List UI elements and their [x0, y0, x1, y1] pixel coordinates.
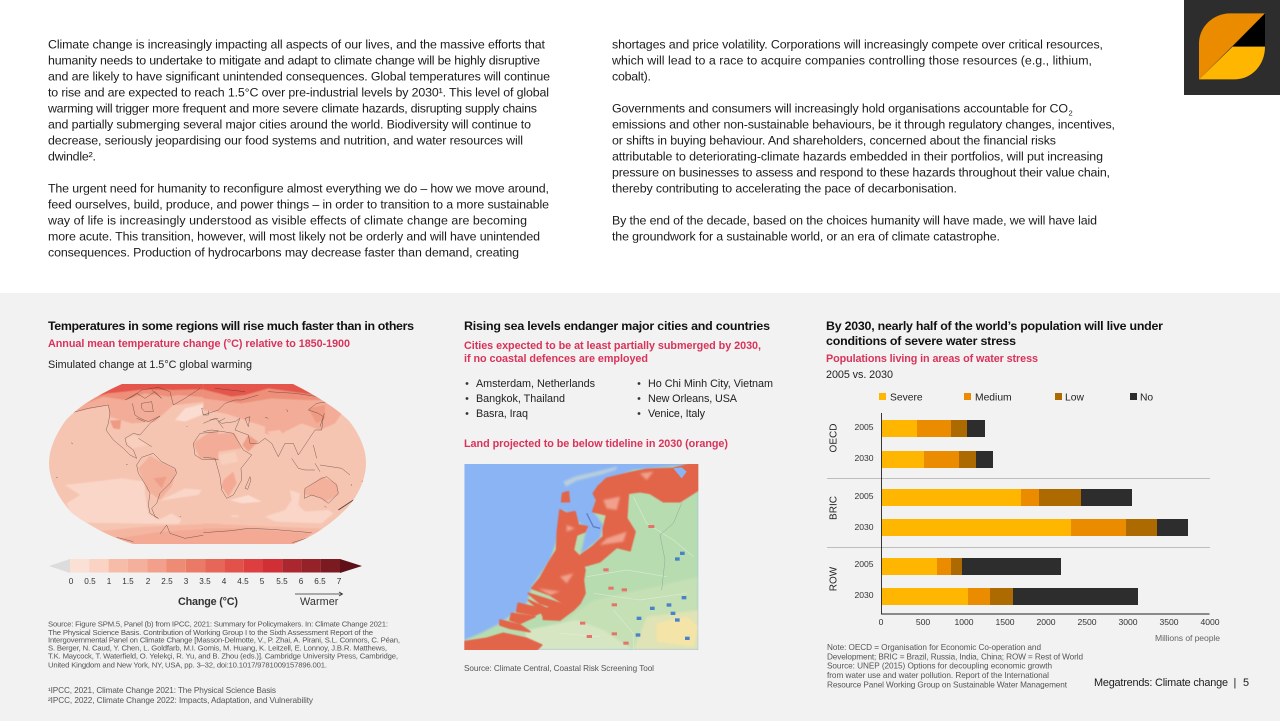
colour bar legend: 7	[337, 577, 342, 586]
body text: right column: thereby contributing to accelerating the pace of decarbonisation.	[612, 182, 957, 196]
colour bar legend: 0.5	[84, 577, 96, 586]
colour bar legend: 5	[260, 577, 265, 586]
caption: simulated change: Simulated change at 1.5°C global warming	[48, 359, 252, 371]
body text: right column: cobalt).	[612, 70, 651, 84]
footnotes	[48, 686, 314, 705]
note and source: water stress: from water use and water pollution. Report of the International	[827, 671, 1049, 680]
legend: stress levels: Medium	[975, 392, 1012, 404]
note and source: water stress: Development; BRIC = Brazil, Russia, India, China; ROW = Rest of World	[827, 652, 1083, 661]
axis ticks: 1500	[995, 617, 1015, 627]
body text: right column: the groundwork for a sustainable world, or an era of climate catastrophe.	[612, 230, 1000, 244]
western hemisphere	[56, 380, 218, 545]
bars: BRIC 2005	[882, 489, 1132, 506]
axis ticks: 0	[879, 617, 884, 627]
heading: water stress: By 2030, nearly half of the world’s population will live under	[826, 319, 1163, 333]
colour bar legend: 1.5	[122, 577, 134, 586]
body text: left column	[47, 38, 550, 260]
body text: right column: pressure on businesses to assess and respond to these hazards throughout their value chain,	[612, 166, 1110, 180]
year labels: 2030	[854, 453, 874, 463]
list of cities	[466, 378, 773, 420]
background: lower grey band	[0, 293, 1280, 721]
body text: left column: Climate change is increasingly impacting all aspects of our lives, and the massive efforts that	[48, 38, 546, 52]
body text: right column: which will lead to a race to acquire companies controlling those resources (e.g., lithium,	[611, 54, 1092, 68]
bars: ROW 2005	[882, 558, 1061, 575]
year labels: 2030	[854, 590, 874, 600]
body text: left column: more acute. This transition, however, will most likely not be orderly and will have unintended	[48, 230, 540, 244]
axis title: Millions of people	[1155, 633, 1220, 643]
heading: sea levels: Rising sea levels endanger major cities and countries	[464, 319, 770, 333]
body text: right column: or shifts in buying behaviour. And shareholders, concerned about the financial risks	[612, 134, 1056, 148]
colour bar legend: 1	[107, 577, 112, 586]
body text: left column: dwindle².	[48, 150, 96, 164]
year labels	[854, 422, 874, 600]
source text: IPCC: The Physical Science Basis. Contribution of Working Group I to the Sixth Assessment Report of the	[48, 628, 373, 637]
source text: IPCC: Source: Figure SPM.5, Panel (b) from IPCC, 2021: Summary for Policymakers. In: Climate Change 2021:	[48, 620, 388, 629]
body text: right column	[611, 38, 1115, 244]
body text: left column: feed ourselves, build, produce, and power things – in order to transition to a more sustainable	[48, 198, 549, 212]
body text: right column: shortages and price volatility. Corporations will increasingly compete over critical resources,	[612, 38, 1103, 52]
legend: stress levels: Low	[1065, 392, 1084, 404]
footnotes: ²IPCC, 2022, Climate Change 2022: Impacts, Adaptation, and Vulnerability	[48, 696, 314, 705]
panel: sea levels	[464, 319, 773, 673]
axis ticks: 500	[916, 617, 930, 627]
list of cities: New Orleans, USA	[648, 393, 738, 405]
footer: page label: Megatrends: Climate change	[1094, 677, 1228, 689]
heading: temperatures: Temperatures in some regions will rise much faster than in others	[48, 319, 414, 333]
year labels: 2005	[854, 422, 874, 432]
bar chart: population by stress level	[827, 413, 1220, 643]
source text: IPCC: United Kingdom and New York, NY, USA, pp. 3–32, doi:10.1017/9781009157896.001.	[48, 660, 327, 669]
eastern hemisphere	[203, 380, 363, 545]
legend: stress levels: No	[1140, 392, 1153, 404]
source text: IPCC: T.K. Maycock, T. Waterfield, O. Yelekçi, R. Yu, and B. Zhou (eds.)]. Cambridge University Press, Cambridge,	[48, 652, 398, 661]
subheading: cities submerged: Cities expected to be at least partially submerged by 2030,	[464, 340, 761, 352]
body text: left column: and partially submerging several major cities around the world. Biodiversity will continue to	[48, 118, 531, 132]
footnotes: ¹IPCC, 2021, Climate Change 2021: The Physical Science Basis	[48, 686, 276, 695]
source text: IPCC	[48, 620, 400, 669]
bars: BRIC 2030	[882, 519, 1188, 536]
axis ticks: 1000	[954, 617, 974, 627]
heading: water stress: conditions of severe water stress	[826, 334, 1016, 348]
panel: temperatures	[45, 319, 414, 705]
legend: stress levels	[879, 392, 1153, 404]
group labels: OECD	[828, 424, 840, 452]
heading: water stress	[826, 319, 1163, 348]
arrow: warmer: Warmer	[300, 596, 339, 608]
bars: OECD 2030	[882, 451, 993, 468]
list of cities: Venice, Italy	[648, 408, 706, 420]
subheading: populations: Populations living in areas of water stress	[826, 353, 1038, 365]
group labels: ROW	[828, 566, 840, 591]
body text: right column: By the end of the decade, based on the choices humanity will have made, we will have laid	[612, 214, 1097, 228]
group labels	[828, 424, 840, 591]
subheading: annual mean temperature: Annual mean temperature change (°C) relative to 1850-1900	[48, 338, 350, 350]
world map	[45, 380, 370, 548]
subheading: land below tideline: Land projected to be below tideline in 2030 (orange)	[464, 438, 728, 450]
axis ticks	[879, 617, 1220, 627]
logo	[1184, 0, 1280, 95]
axis ticks: 3000	[1118, 617, 1138, 627]
colour bar legend: 3	[184, 577, 189, 586]
colour bar legend: 6.5	[314, 577, 326, 586]
colour bar legend: 5.5	[276, 577, 288, 586]
body text: right column: emissions and other non-sustainable behaviours, be it through regulatory changes, incentives,	[612, 118, 1115, 132]
source text: IPCC: Intergovernmental Panel on Climate Change [Masson-Delmotte, V., P. Zhai, A. Pirani, S.L. Connors, C. Péan,	[48, 636, 400, 645]
body text: left column: The urgent need for humanity to reconfigure almost everything we do – how we move around,	[48, 182, 549, 196]
body text: left column: consequences. Production of hydrocarbons may decrease faster than demand, creating	[48, 246, 519, 260]
list of cities: Ho Chi Minh City, Vietnam	[648, 378, 773, 390]
year labels: 2005	[854, 559, 874, 569]
note and source: water stress: Source: UNEP (2015) Options for decoupling economic growth	[827, 662, 1052, 671]
colour bar legend: 4	[222, 577, 227, 586]
note and source: water stress: Resource Panel Working Group on Sustainable Water Management	[827, 680, 1068, 689]
year labels: 2005	[854, 491, 874, 501]
axis ticks: 3500	[1159, 617, 1179, 627]
subheading: cities submerged: if no coastal defences are employed	[464, 353, 648, 365]
axis ticks: 2000	[1036, 617, 1056, 627]
map: Netherlands	[464, 464, 698, 650]
bars: ROW 2030	[882, 588, 1138, 605]
colour bar legend: 4.5	[237, 577, 249, 586]
colour bar legend: 6	[299, 577, 304, 586]
year labels: 2030	[854, 522, 874, 532]
list of cities: Bangkok, Thailand	[476, 393, 565, 405]
legend title: change: Change (°C)	[178, 596, 238, 608]
body text: left column: warming will trigger more frequent and more severe climate hazards, disrupting supply chains	[47, 102, 537, 116]
footer: page label: 5	[1243, 677, 1249, 689]
axis ticks: 4000	[1200, 617, 1220, 627]
body text: left column: and are likely to have significant unintended consequences. Global temperatures will continue	[48, 70, 550, 84]
group labels: BRIC	[828, 496, 840, 520]
footer: page label: |	[1234, 677, 1236, 689]
axis ticks: 2500	[1077, 617, 1097, 627]
body text: left column: way of life is increasingly understood as visible effects of climate change are becoming	[47, 214, 527, 228]
note and source: water stress	[827, 643, 1083, 689]
colour bar legend: 2	[146, 577, 151, 586]
list of cities: Basra, Iraq	[476, 408, 528, 420]
panel: water stress	[826, 319, 1220, 689]
note and source: water stress: Note: OECD = Organisation for Economic Co-operation and	[827, 643, 1041, 652]
caption: 2005 vs. 2030: 2005 vs. 2030	[826, 369, 893, 381]
body text: right column: Governments and consumers will increasingly hold organisations accountable for CO	[612, 102, 1068, 116]
arrow: warmer	[295, 592, 342, 608]
body text: left column: humanity needs to undertake to mitigate and adapt to climate change will be highly disruptive	[48, 54, 540, 68]
body text: right column: 2	[1068, 108, 1073, 118]
source: Climate Central: Source: Climate Central, Coastal Risk Screening Tool	[464, 664, 654, 673]
list of cities: Amsterdam, Netherlands	[476, 378, 596, 390]
colour bar legend: 3.5	[199, 577, 211, 586]
source text: IPCC: S. Berger, N. Caud, Y. Chen, L. Goldfarb, M.I. Gomis, M. Huang, K. Leitzell, E. Lonnoy, J.B.R. Matthews,	[48, 644, 387, 653]
body text: left column: decrease, seriously jeopardising our food systems and nutrition, and water resources will	[48, 134, 523, 148]
colour bar legend: 2.5	[161, 577, 173, 586]
legend: stress levels: Severe	[890, 392, 923, 404]
colour bar legend	[49, 559, 362, 586]
bars: OECD 2005	[882, 420, 985, 437]
colour bar legend: 0	[69, 577, 74, 586]
body text: left column: to rise and are expected to reach 1.5°C over pre-industrial levels by 2030¹. This level of global	[48, 86, 549, 100]
body text: right column: attributable to deteriorating-climate hazards embedded in their portfolios, will put increasing	[612, 150, 1103, 164]
subheading: cities submerged	[464, 340, 761, 365]
